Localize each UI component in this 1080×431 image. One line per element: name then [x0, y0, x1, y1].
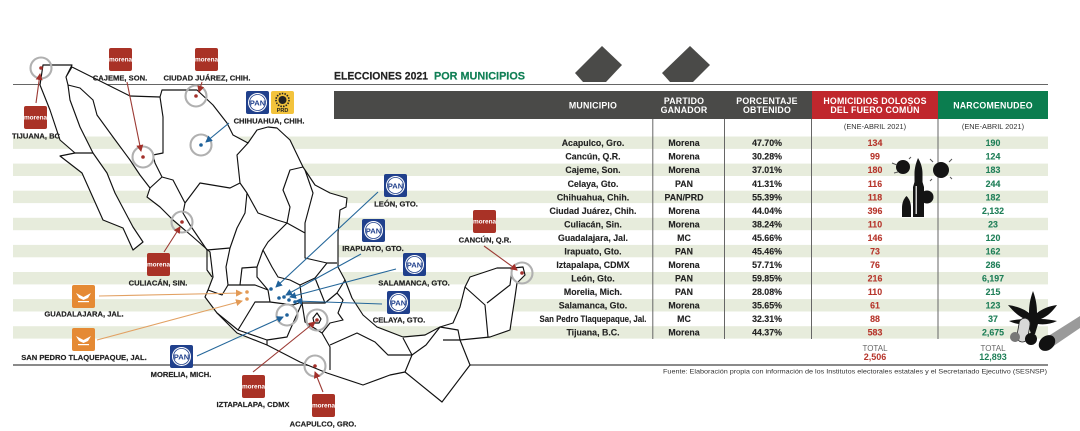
row: Cajeme: 37.01%	[752, 165, 782, 175]
row: Irapuato	[564, 246, 1000, 256]
map marker rings and dots	[30, 58, 532, 376]
table header: PARTIDO	[664, 96, 704, 106]
row: Culiacán: Morena	[668, 220, 700, 230]
callout: San Pedro Tlaquepaque: SAN PEDRO TLAQUEPAQUE, JAL.	[21, 353, 147, 362]
row: Celaya: PAN	[675, 179, 693, 189]
row: Acapulco: Acapulco, Gro.	[562, 138, 624, 148]
row: Irapuato: 45.46%	[752, 246, 782, 256]
row: Salamanca: 61	[870, 300, 880, 310]
table header: DEL FUERO COMÚN	[830, 104, 920, 115]
period sub-headers: (ENE-ABRIL 2021)	[962, 122, 1024, 131]
row: Tijuana: Tijuana, B.C.	[566, 328, 620, 338]
callout: Irapuato: IRAPUATO, GTO.	[342, 244, 404, 253]
callout: Cancún: CANCÚN, Q.R.	[459, 236, 511, 244]
table header: NARCOMENUDEO	[953, 100, 1033, 110]
CDMX outline	[313, 313, 321, 323]
callout: Culiacán: CULIACÁN, SIN.	[129, 278, 187, 288]
state borders	[75, 97, 512, 372]
callout: León	[374, 174, 418, 208]
row: Morelia: 110	[868, 287, 882, 297]
callout: Chihuahua: PRD	[277, 108, 288, 114]
row: Celaya	[568, 179, 1000, 189]
row: Cajeme	[565, 165, 1000, 175]
row: San Pedro Tlaquepaque: MC	[677, 314, 691, 324]
row: Chihuahua: Chihuahua, Chih.	[557, 192, 629, 202]
row: Ciudad Juárez: 2,132	[982, 206, 1004, 216]
homicide total	[862, 344, 888, 362]
callout: Chihuahua: CHIHUAHUA, CHIH.	[234, 116, 304, 126]
callout: Celaya	[373, 291, 425, 324]
row: Acapulco	[562, 138, 1000, 148]
callout: Ciudad Juárez	[164, 48, 250, 82]
row: San Pedro Tlaquepaque: 37	[988, 314, 998, 324]
row: Morelia: 215	[986, 287, 1000, 297]
row: Celaya: 244	[986, 179, 1000, 189]
title: ELECCIONES 2021	[334, 70, 428, 82]
row: Cajeme: 183	[986, 165, 1000, 175]
callout: Acapulco: ACAPULCO, GRO.	[290, 420, 356, 428]
row: Cajeme: 180	[868, 165, 882, 175]
row: Acapulco: 190	[986, 138, 1000, 148]
table header: GANADOR	[661, 105, 708, 115]
callout: Acapulco: morena	[312, 402, 335, 410]
homicide total: 2,506	[864, 352, 886, 362]
row: Tijuana: 44.37%	[752, 328, 782, 338]
callout: Acapulco	[290, 394, 356, 428]
row: Acapulco: 134	[868, 138, 882, 148]
row: Iztapalapa: Morena	[668, 260, 700, 270]
map of Mexico	[40, 65, 525, 402]
row: León: 216	[868, 274, 882, 284]
callout: Irapuato	[342, 219, 404, 253]
title	[334, 70, 525, 82]
period sub-headers	[844, 122, 1024, 131]
row: Salamanca: Salamanca, Gto.	[559, 300, 627, 310]
row: San Pedro Tlaquepaque: San Pedro Tlaquepaque, Jal.	[540, 314, 646, 324]
row: Culiacán	[564, 220, 998, 230]
row: León: PAN	[675, 274, 693, 284]
callout: Culiacán: morena	[147, 262, 170, 268]
row: Culiacán: 110	[868, 220, 882, 230]
row: Guadalajara: 120	[986, 233, 1000, 243]
row: León: 6,197	[982, 274, 1004, 284]
row: Morelia	[564, 287, 1000, 297]
row: Irapuato: Irapuato, Gto.	[564, 246, 622, 256]
row: Chihuahua: PAN/PRD	[665, 192, 703, 202]
row: Guadalajara: MC	[677, 233, 691, 243]
row: Culiacán: Culiacán, Sin.	[564, 220, 622, 230]
map outline	[40, 65, 525, 402]
arrows	[36, 74, 517, 392]
title: POR MUNICIPIOS	[434, 70, 525, 82]
row: Chihuahua: 118	[868, 192, 882, 202]
callout: Celaya: PAN	[391, 298, 406, 308]
row: Iztapalapa: 76	[870, 260, 880, 270]
callout: Chihuahua	[234, 91, 304, 126]
callout: Morelia: PAN	[174, 352, 189, 362]
source note: Fuente: Elaboración propia con información de los Institutos electorales estatales y el Secretariado Ejecutivo (SESNSP)	[663, 368, 1047, 376]
table header	[334, 91, 1048, 119]
callout: Iztapalapa: IZTAPALAPA, CDMX	[217, 400, 289, 409]
row: Guadalajara: 45.66%	[752, 233, 782, 243]
row: Ciudad Juárez	[549, 206, 1004, 216]
callout: San Pedro Tlaquepaque	[21, 328, 147, 362]
row: Cajeme: Morena	[668, 165, 700, 175]
callout: León: LEÓN, GTO.	[374, 200, 418, 208]
callout: Cancún	[459, 210, 511, 244]
row: Celaya: 116	[868, 179, 882, 189]
homicide total: TOTAL	[862, 344, 888, 353]
row: Iztapalapa: 286	[986, 260, 1000, 270]
row: Irapuato: PAN	[675, 246, 693, 256]
table header: OBTENIDO	[743, 105, 791, 115]
icon: cannabis leaf and pills	[1008, 291, 1080, 354]
callout: Tijuana: TIJUANA, BC	[12, 132, 61, 140]
row: Iztapalapa: Iztapalapa, CDMX	[556, 260, 630, 270]
row: León: 59.85%	[752, 274, 782, 284]
row: Morelia: PAN	[675, 287, 693, 297]
row: Cancún: 30.28%	[752, 152, 782, 162]
row: Tijuana: 583	[868, 328, 882, 338]
row: Irapuato: 73	[870, 246, 880, 256]
callout: Morelia	[151, 345, 211, 379]
callout: Salamanca: PAN	[407, 260, 422, 270]
period sub-headers: (ENE-ABRIL 2021)	[844, 122, 906, 131]
table header: HOMICIDIOS DOLOSOS	[823, 96, 927, 106]
row: Iztapalapa: 57.71%	[752, 260, 782, 270]
callout: Cajeme: morena	[109, 56, 132, 64]
row: Tijuana	[566, 328, 1004, 338]
row: Chihuahua: 182	[986, 192, 1000, 202]
row: Tijuana: 2,675	[982, 328, 1004, 338]
row: Tijuana: Morena	[668, 328, 700, 338]
callout: Cancún: morena	[473, 218, 496, 226]
row: Iztapalapa	[556, 260, 1000, 270]
row: Ciudad Juárez: 396	[868, 206, 882, 216]
row: León: León, Gto.	[571, 274, 615, 284]
row: Acapulco: Morena	[668, 138, 700, 148]
row: Guadalajara	[558, 233, 1000, 243]
callout: Tijuana	[12, 106, 61, 140]
callout: Celaya: CELAYA, GTO.	[373, 316, 425, 324]
row: Celaya: Celaya, Gto.	[568, 179, 618, 189]
icon: bullets and bullet holes	[892, 157, 952, 217]
decorative pentagons	[575, 46, 710, 82]
row: Acapulco: 47.70%	[752, 138, 782, 148]
row: Guadalajara: 146	[868, 233, 882, 243]
callout: Cajeme: CAJEME, SON.	[93, 74, 147, 82]
row: Chihuahua	[557, 192, 1000, 202]
callout: Salamanca: SALAMANCA, GTO.	[378, 278, 450, 288]
row: San Pedro Tlaquepaque	[540, 314, 998, 324]
row: Cancún: Cancún, Q.R.	[565, 152, 621, 162]
table header: MUNICIPIO	[569, 100, 617, 110]
row: Cancún	[565, 152, 1000, 162]
callout: Iztapalapa: morena	[242, 384, 265, 390]
narcomenudeo total: 12,893	[979, 352, 1007, 362]
row: Salamanca: 123	[986, 300, 1000, 310]
callout: Iztapalapa	[217, 375, 289, 409]
row: Irapuato: 162	[986, 246, 1000, 256]
row: San Pedro Tlaquepaque: 88	[870, 314, 880, 324]
row: Ciudad Juárez: Morena	[668, 206, 700, 216]
row: Culiacán: 23	[988, 220, 998, 230]
row: Cancún: 99	[870, 152, 880, 162]
row: Celaya: 41.31%	[752, 179, 782, 189]
callout: Morelia: MORELIA, MICH.	[151, 370, 211, 379]
row: Ciudad Juárez: 44.04%	[752, 206, 782, 216]
callout: Guadalajara: GUADALAJARA, JAL.	[44, 310, 124, 318]
row: Chihuahua: 55.39%	[752, 192, 782, 202]
row: Guadalajara: Guadalajara, Jal.	[558, 233, 628, 243]
callout: Cajeme	[93, 48, 147, 82]
callout: Salamanca	[378, 253, 450, 288]
narcomenudeo total: TOTAL	[980, 344, 1006, 353]
callout: Chihuahua: PAN	[250, 98, 265, 108]
narcomenudeo total	[979, 344, 1007, 362]
callout: Ciudad Juárez: morena	[195, 56, 218, 64]
callout: León: PAN	[388, 182, 403, 190]
row: Culiacán: 38.24%	[752, 220, 782, 230]
row: Salamanca: 35.65%	[752, 300, 782, 310]
row: San Pedro Tlaquepaque: 32.31%	[752, 314, 782, 324]
row: Cancún: 124	[986, 152, 1000, 162]
row: Morelia: 28.08%	[752, 287, 782, 297]
table header: PORCENTAJE	[736, 96, 798, 106]
row: Ciudad Juárez: Ciudad Juárez, Chih.	[549, 206, 637, 216]
callout: Tijuana: morena	[24, 114, 47, 122]
row: Salamanca: Morena	[668, 300, 700, 310]
row: Morelia: Morelia, Mich.	[564, 287, 622, 297]
row: Cajeme: Cajeme, Son.	[565, 165, 621, 175]
row: Cancún: Morena	[668, 152, 700, 162]
row: León	[571, 274, 1004, 284]
callout: Culiacán	[129, 253, 187, 288]
callout: Ciudad Juárez: CIUDAD JUÁREZ, CHIH.	[164, 74, 250, 82]
row: Salamanca	[559, 300, 1000, 310]
callout: Irapuato: PAN	[366, 226, 381, 236]
table rows	[540, 138, 1004, 338]
callout: Guadalajara	[44, 285, 124, 318]
